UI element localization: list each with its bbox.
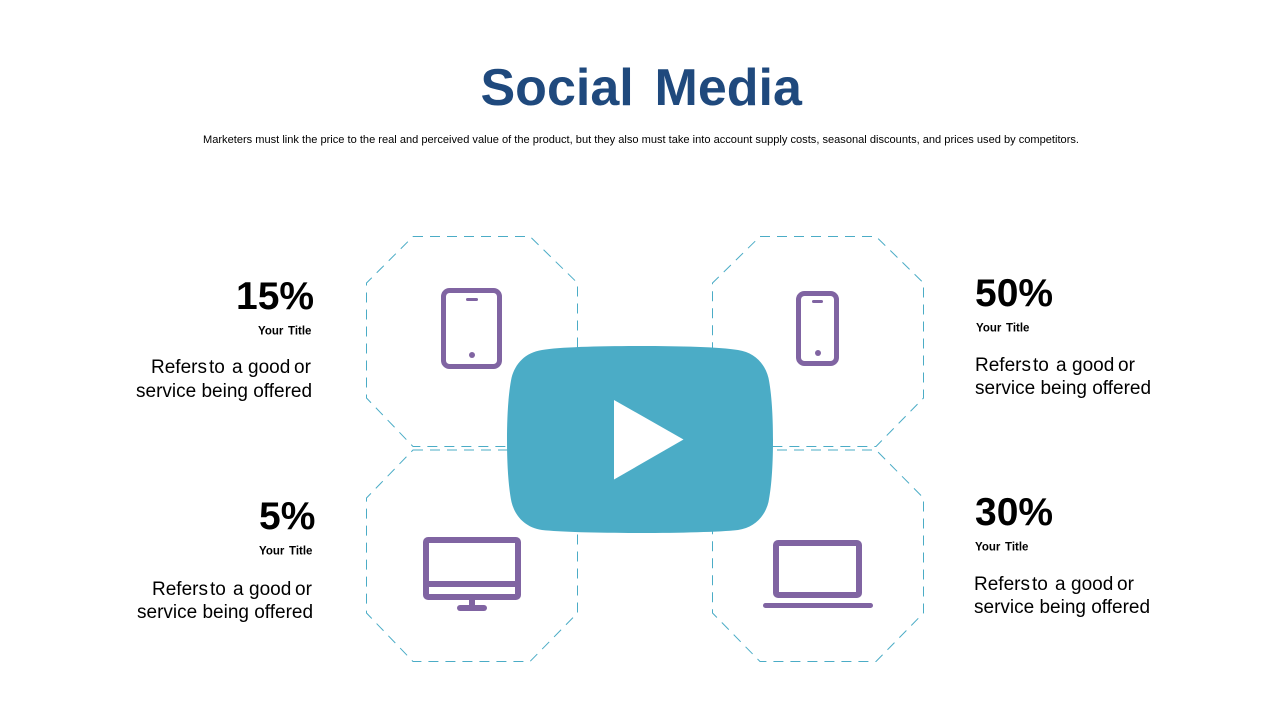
stat block: 15%: Refers [151, 357, 207, 378]
stat block: 30%: 30% [975, 491, 1053, 534]
stat block: 15%: Your [258, 326, 284, 338]
stat block: 5% [137, 495, 315, 623]
stat block: 30%: or [1117, 574, 1135, 595]
stat block: 30%: Title [1005, 542, 1028, 554]
icon: laptop [763, 543, 873, 608]
stat block: 5%: good [249, 579, 291, 600]
stat block: 50%: to [1033, 355, 1049, 376]
stat block: 5%: service being offered [137, 602, 313, 623]
stat block: 50%: or [1118, 355, 1136, 376]
stat block: 15%: Title [288, 326, 311, 338]
stat block: 15%: or [294, 357, 312, 378]
icon: smartphone [798, 294, 836, 364]
stat block: 30% [974, 491, 1150, 618]
stat block: 15%: service being offered [136, 381, 312, 402]
stat block: 5%: Your [259, 546, 285, 558]
stat block: 5%: Title [289, 546, 312, 558]
stat block: 30%: to [1032, 574, 1048, 595]
stat block: 5%: a [233, 579, 244, 600]
stat block: 15%: good [248, 357, 290, 378]
panel: top-right dashed octagon [712, 236, 924, 446]
stat block: 50%: service being offered [975, 378, 1151, 399]
stat block: 50%: Title [1006, 322, 1029, 334]
panel: top-left dashed octagon [366, 236, 578, 446]
stat block: 30%: a [1055, 574, 1066, 595]
stat block: 5%: 5% [259, 495, 315, 538]
icon: desktop monitor [426, 540, 518, 611]
subtitle text: Marketers must link the price to the real and perceived value of the product, but they also must take into account supply costs, seasonal discounts, and prices used by competitors. [203, 134, 1079, 146]
stat block: 15%: 15% [236, 275, 314, 318]
panel: bottom-right dashed octagon [712, 450, 924, 662]
stat block: 15%: a [232, 357, 243, 378]
stat block: 50%: Refers [975, 355, 1031, 376]
icon: tablet [444, 290, 500, 366]
stat block: 30%: good [1071, 574, 1113, 595]
stat block: 5%: or [295, 579, 313, 600]
stat block: 15%: to [209, 357, 225, 378]
stat block: 50%: good [1072, 355, 1114, 376]
stat block: 50%: Your [976, 322, 1002, 334]
stat block: 30%: service being offered [974, 597, 1150, 618]
panel: bottom-left dashed octagon [366, 450, 578, 662]
stat block: 50%: 50% [975, 272, 1053, 315]
stat block: 50%: a [1056, 355, 1067, 376]
stat block: 30%: Refers [974, 574, 1030, 595]
stat block: 15% [136, 275, 314, 402]
icon: central video play button [507, 346, 773, 533]
stat block: 5%: Refers [152, 579, 208, 600]
stat block: 30%: Your [975, 542, 1001, 554]
stat block: 50% [975, 272, 1151, 399]
title: Social [480, 59, 634, 117]
title: Media [654, 59, 803, 117]
stat block: 5%: to [210, 579, 226, 600]
